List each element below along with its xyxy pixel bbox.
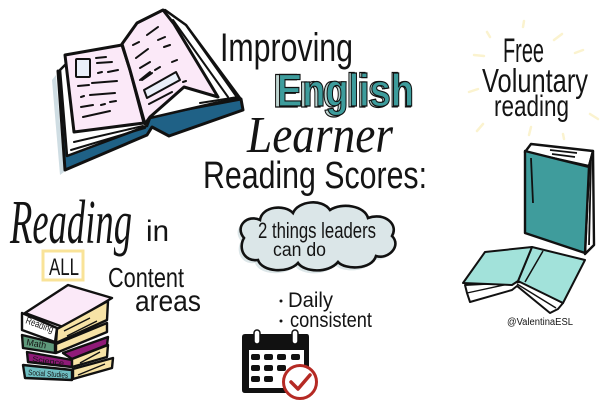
highlight: ALL: ALL: [49, 254, 79, 281]
heading: Content areas: areas: [135, 285, 201, 318]
title line: English: English: [277, 65, 414, 116]
title line: Improving: Improving: [220, 26, 353, 70]
title line: Reading Scores: Reading Scores:: [203, 155, 427, 197]
decoration: yellow rays: [469, 21, 598, 139]
cloud text line 1: 2 things leaders: [258, 218, 376, 243]
heading: Free Voluntary reading: reading: [494, 90, 569, 123]
book label: Science: Science: [32, 356, 65, 367]
illustration: closed teal book: [525, 144, 594, 254]
heading: Free Voluntary reading: Free: [503, 32, 544, 70]
title line: Learner: Learner: [246, 107, 394, 164]
title: [203, 26, 427, 197]
icon: calendar with check: [242, 330, 316, 398]
heading: Content areas: [108, 262, 201, 318]
book label: Reading: Reading: [24, 315, 55, 336]
cloud callout: [238, 202, 395, 273]
illustration: open book: [52, 10, 243, 175]
cloud text line 2: can do: [273, 240, 326, 261]
bullet list: Daily: [288, 289, 333, 312]
signature: @ValentinaESL: [507, 317, 573, 328]
illustration: stack of books: [22, 285, 113, 380]
book label: Social Studies: Social Studies: [28, 368, 68, 380]
bullet list: consistent: [290, 309, 372, 332]
bullet list: [280, 289, 372, 332]
heading: Reading in: in: [146, 215, 169, 248]
heading: Content areas: Content: [108, 262, 184, 293]
title line: English: English: [273, 64, 413, 117]
book label: Math: Math: [26, 337, 47, 350]
illustration: open teal book: [463, 247, 585, 313]
heading: Reading in: Reading: [9, 189, 132, 257]
heading: Free Voluntary reading: [482, 32, 588, 123]
highlight: ALL: [43, 251, 83, 281]
